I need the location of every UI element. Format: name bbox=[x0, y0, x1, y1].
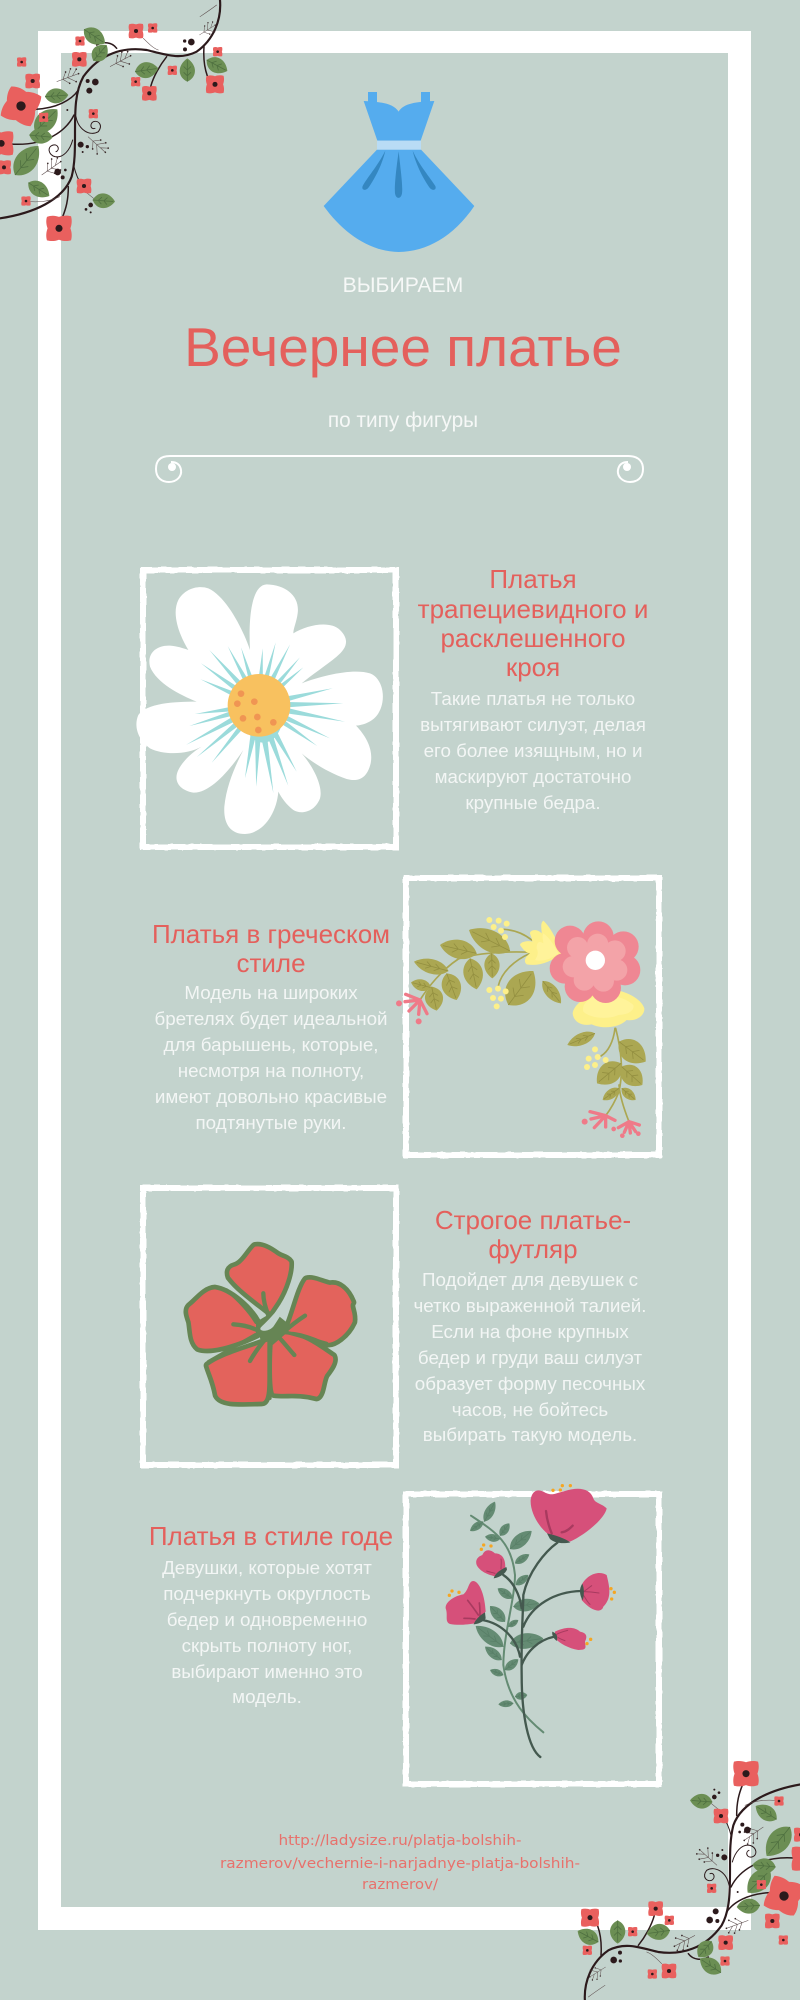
heading 3: футляр bbox=[488, 1234, 578, 1264]
heading 4: Платья в стиле годе bbox=[149, 1521, 393, 1551]
body 3 bbox=[413, 1269, 647, 1445]
decoration: bottom-right floral vine bbox=[574, 1761, 800, 2000]
source link text: razmerov/ bbox=[362, 1877, 438, 1893]
main title: Вечернее платье bbox=[184, 316, 622, 378]
icon: blue dress bbox=[324, 92, 474, 252]
body 3: Подойдет для девушек с bbox=[422, 1269, 638, 1290]
heading 1: Платья bbox=[489, 564, 577, 594]
panel: image frame 1 bbox=[143, 570, 396, 847]
body 2: бретелях будет идеальной bbox=[154, 1008, 388, 1029]
decoration: top-left floral vine bbox=[0, 0, 231, 241]
section 1 text bbox=[418, 564, 648, 813]
panel: image frame 4 bbox=[406, 1494, 659, 1784]
body 4 bbox=[162, 1557, 372, 1707]
body 3: Если на фоне крупных bbox=[431, 1321, 629, 1342]
body 3: часов, не бойтесь bbox=[452, 1399, 608, 1420]
heading 1: расклешенного bbox=[440, 623, 626, 653]
body 3: выбирать такую модель. bbox=[423, 1424, 637, 1445]
section 4 text bbox=[149, 1521, 393, 1707]
body 1: крупные бедра. bbox=[465, 792, 601, 813]
body 1: Такие платья не только bbox=[431, 688, 635, 709]
body 1: его более изящным, но и bbox=[424, 740, 642, 761]
body 1 bbox=[420, 688, 646, 813]
source link text bbox=[220, 1833, 580, 1893]
body 3: четко выраженной талией. bbox=[413, 1295, 647, 1316]
section 2 text bbox=[152, 919, 390, 1133]
body 2: несмотря на полноту, bbox=[178, 1060, 364, 1081]
body 3: бедер и груди ваш силуэт bbox=[418, 1347, 642, 1368]
body 2 bbox=[154, 982, 388, 1133]
heading 3 bbox=[435, 1205, 631, 1264]
ornamental divider bbox=[156, 456, 643, 482]
body 2: подтянутые руки. bbox=[195, 1112, 347, 1133]
heading 2: стиле bbox=[236, 948, 306, 978]
icon: pink flowers sprig bbox=[446, 1484, 616, 1757]
body 1: вытягивают силуэт, делая bbox=[420, 714, 646, 735]
body 4: выбирают именно это bbox=[171, 1661, 363, 1682]
panel: image frame 2 bbox=[406, 878, 659, 1155]
body 2: Модель на широких bbox=[184, 982, 358, 1003]
body 4: бедер и одновременно bbox=[167, 1609, 367, 1630]
body 4: скрыть полноту ног, bbox=[182, 1635, 352, 1656]
body 1: маскируют достаточно bbox=[435, 766, 631, 787]
subtitle bottom: по типу фигуры bbox=[328, 409, 478, 432]
heading 3: Строгое платье- bbox=[435, 1205, 631, 1235]
body 4: Девушки, которые хотят bbox=[162, 1557, 372, 1578]
icon: floral corner bouquet bbox=[396, 917, 652, 1138]
icon: white daisy bbox=[136, 584, 383, 834]
heading 1 bbox=[418, 564, 648, 682]
heading 1: трапециевидного и bbox=[418, 594, 648, 624]
body 4: подчеркнуть округлость bbox=[163, 1583, 371, 1604]
source link text: http://ladysize.ru/platja-bolshih- bbox=[278, 1833, 522, 1849]
body 2: для барышень, которые, bbox=[163, 1034, 379, 1055]
heading 2 bbox=[152, 919, 390, 978]
heading 1: кроя bbox=[506, 652, 560, 682]
panel: image frame 3 bbox=[143, 1188, 396, 1465]
body 3: образует форму песочных bbox=[415, 1373, 646, 1394]
body 2: имеют довольно красивые bbox=[155, 1086, 387, 1107]
section 3 text bbox=[413, 1205, 647, 1445]
icon: red hibiscus bbox=[188, 1246, 353, 1402]
body 4: модель. bbox=[232, 1686, 302, 1707]
source link text: razmerov/vechernie-i-narjadnye-platja-bolshih- bbox=[220, 1856, 580, 1872]
subtitle top: ВЫБИРАЕМ bbox=[343, 274, 463, 297]
heading 2: Платья в греческом bbox=[152, 919, 390, 949]
